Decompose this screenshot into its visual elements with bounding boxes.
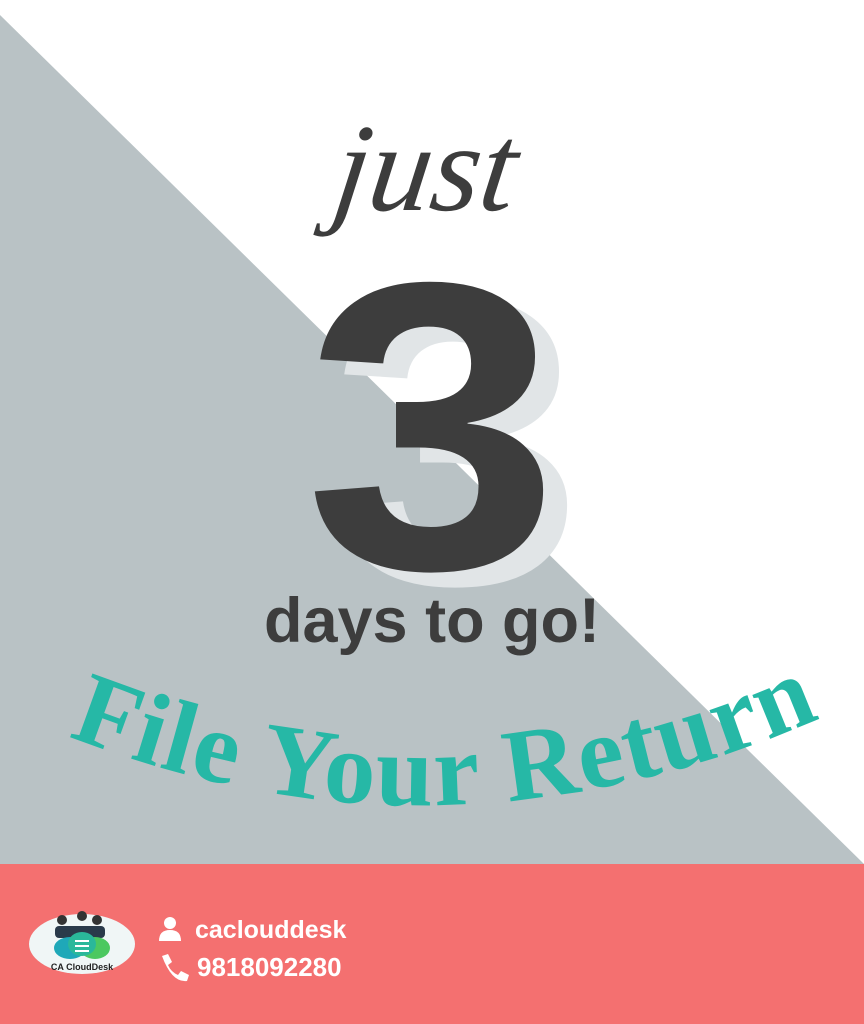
logo (29, 911, 135, 974)
icon: user (159, 917, 181, 941)
big number 3: 3 (328, 213, 584, 671)
footer bar (0, 864, 864, 1024)
heading: just: just (312, 100, 529, 238)
curved text: File Your Return: File Your Return (70, 674, 820, 806)
username: caclouddesk (195, 916, 347, 944)
phone number: 9818092280 (197, 952, 342, 982)
subheading: days to go: days to go! (264, 586, 600, 656)
big number 3: 3 (304, 198, 560, 656)
logo: CA CloudDesk (51, 962, 114, 972)
icon: phone (162, 954, 189, 981)
